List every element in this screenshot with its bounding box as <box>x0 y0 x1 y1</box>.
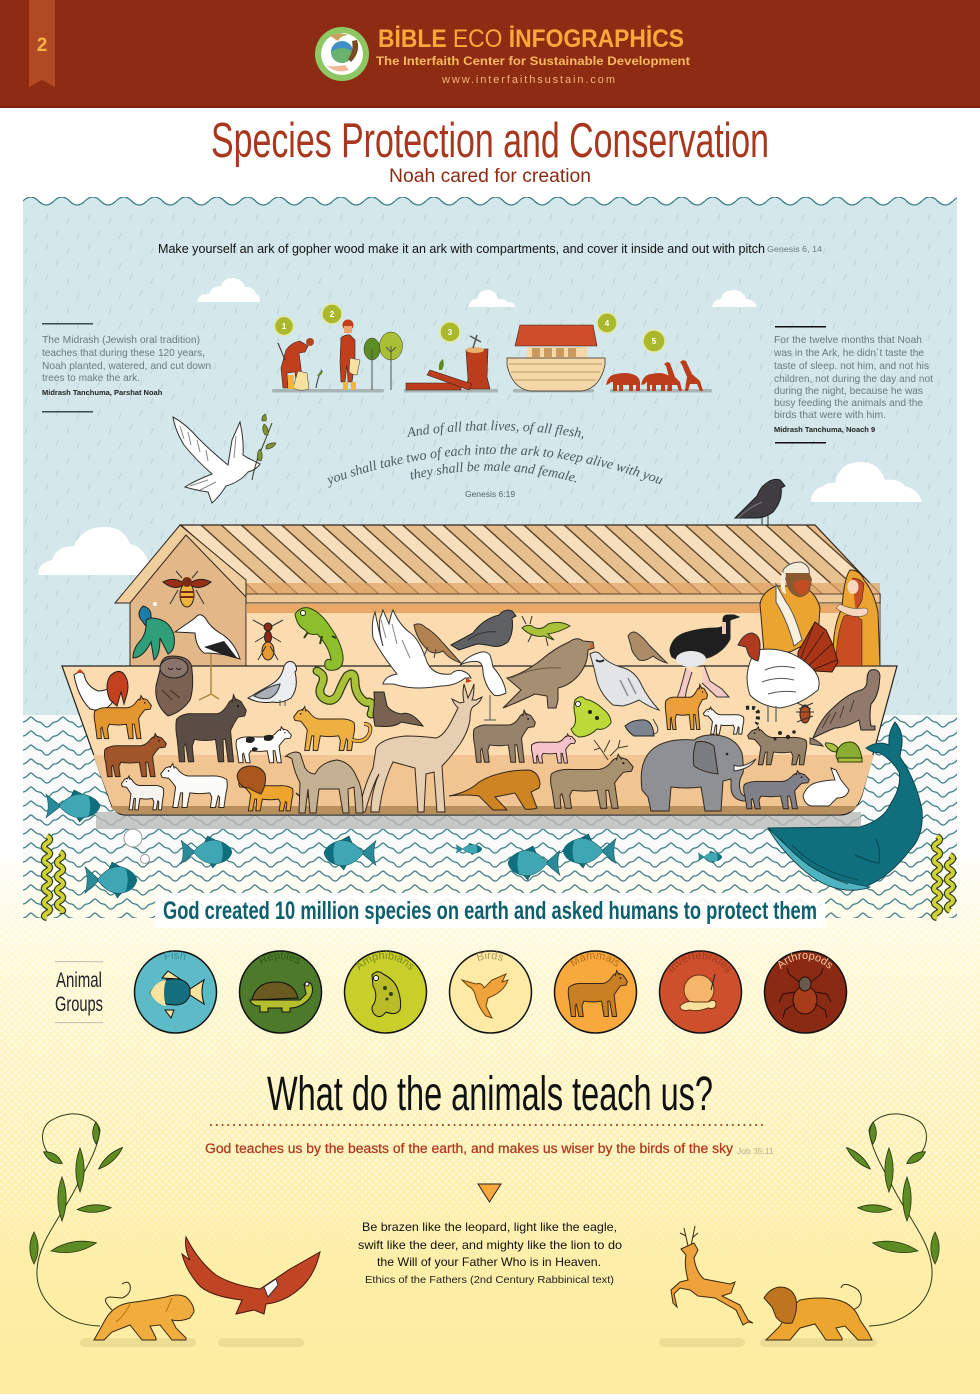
job reference: Job 35:11 <box>737 1146 774 1156</box>
midrash text right: children, not during the day and not <box>774 373 933 385</box>
bug <box>796 703 814 723</box>
verse reference: Genesis 6:19 <box>465 489 515 499</box>
side cabin <box>115 525 246 666</box>
whale <box>768 722 922 890</box>
step number badges: 2 <box>330 310 335 319</box>
step number badges: 5 <box>652 337 657 346</box>
midrash text right <box>773 326 933 444</box>
curved verse: And of all that lives, of all flesh, <box>407 420 584 440</box>
gazelle <box>359 684 482 812</box>
peacock <box>133 602 174 660</box>
fish in the sea <box>46 790 722 898</box>
vine right <box>844 1114 939 1326</box>
midrash text left: teaches that during these 120 years, <box>42 347 205 359</box>
elephant <box>641 735 756 811</box>
crow <box>451 610 516 650</box>
job verse: God teaches us by the beasts of the earth, and makes us wiser by the birds of the sky <box>205 1141 733 1156</box>
scripture line: Genesis 6, 14 <box>767 244 822 254</box>
dog <box>104 734 166 777</box>
group: birds: Birds <box>476 951 503 961</box>
egret <box>460 652 506 720</box>
midrash text right: during the night, because he was <box>774 385 923 397</box>
lion right <box>764 1284 872 1340</box>
brand subtitle: The Interfaith Center for Sustainable Development <box>376 54 690 68</box>
turtle <box>825 742 862 762</box>
ostrich <box>670 615 739 698</box>
midrash text left: The Midrash (Jewish oral tradition) <box>42 334 200 346</box>
curved verse: you shall take two of each into the ark to keep alive with you <box>327 444 663 488</box>
midrash text right: For the twelve months that Noah <box>774 334 922 346</box>
group: fish <box>134 950 218 1034</box>
dove with olive branch <box>173 414 276 503</box>
seaweed right <box>934 836 953 918</box>
rooster <box>74 669 128 710</box>
page number ribbon: 2 <box>37 35 47 56</box>
lemur <box>703 707 758 734</box>
hull shadow <box>96 812 861 829</box>
rabbit <box>803 768 849 806</box>
animal group circles <box>134 950 848 1034</box>
ground shadows <box>80 1338 877 1347</box>
turkey fan <box>798 622 838 672</box>
sparrow <box>414 624 461 663</box>
group: birds <box>448 950 532 1034</box>
icon: step 3 felled logs <box>406 335 490 390</box>
website: www.interfaithsustain.com <box>441 74 615 86</box>
teaching paragraph <box>358 1220 622 1286</box>
stork <box>175 615 240 700</box>
horse <box>176 695 246 762</box>
group: arthropods <box>764 950 848 1034</box>
donkey <box>473 710 535 762</box>
icon: step 2 watering <box>340 320 402 390</box>
hyena <box>748 727 823 765</box>
midrash text left: Noah planted, watered, and cut down <box>42 360 211 372</box>
teaching paragraph: swift like the deer, and mighty like the lion to do <box>358 1238 622 1252</box>
group: mammals <box>554 950 638 1034</box>
steps timeline <box>272 304 712 392</box>
group: arthropods: Arthropods <box>778 953 832 970</box>
otter <box>449 770 540 810</box>
group: invertebrates: Invertebrates <box>667 951 731 972</box>
banner text <box>155 893 825 928</box>
header band <box>0 0 980 108</box>
icon: step 4 small ark <box>507 325 605 391</box>
teaching paragraph: the Will of your Father Who is in Heaven. <box>377 1255 601 1269</box>
snake <box>317 671 373 714</box>
teaching paragraph: Ethics of the Fathers (2nd Century Rabbinical text) <box>365 1274 614 1286</box>
eagle silhouette <box>182 1237 320 1314</box>
polar bear <box>161 764 227 808</box>
brand title: BİBLE ECO İNFOGRAPHİCS <box>378 25 684 53</box>
owl <box>156 656 193 716</box>
midrash text left: Midrash Tanchuma, Parshat Noah <box>42 388 163 397</box>
curved verse: they shall be male and female. <box>410 461 576 482</box>
raven <box>735 479 785 525</box>
sheep <box>121 776 164 810</box>
midrash text right: taste of sleep. not him, and not his <box>774 360 929 372</box>
arrow <box>478 1184 501 1202</box>
cow <box>236 727 291 763</box>
leopard <box>94 1282 194 1340</box>
deck wall <box>246 603 880 666</box>
deer leaping <box>671 1226 753 1325</box>
midrash text right: was in the Ark, he didn´t taste the <box>773 347 924 359</box>
vulture <box>813 670 880 738</box>
curved verse <box>327 420 663 499</box>
deer <box>551 740 633 808</box>
fox <box>94 696 151 739</box>
teaching paragraph: Be brazen like the leopard, light like the eagle, <box>362 1220 617 1234</box>
mouse <box>625 719 658 736</box>
animal groups label: Groups <box>55 993 103 1016</box>
grasshopper <box>522 616 570 646</box>
quail <box>628 632 667 663</box>
step number badges: 4 <box>605 319 610 328</box>
group: invertebrates <box>658 950 742 1034</box>
animal groups label <box>55 961 103 1023</box>
midrash text right: busy feeding the animals and the <box>774 397 923 409</box>
midrash text right: Midrash Tanchuma, Noach 9 <box>774 425 875 434</box>
pig <box>531 734 576 763</box>
turkey body <box>738 633 819 722</box>
group: reptiles: Reptiles <box>258 951 300 964</box>
roof <box>180 525 880 603</box>
step number badges: 1 <box>282 322 287 331</box>
eagle <box>503 639 594 708</box>
logo <box>315 27 369 81</box>
small deer <box>665 684 708 730</box>
group: reptiles <box>238 950 322 1034</box>
animals on the ark <box>74 562 880 813</box>
icon: step 5 animals in a line <box>606 360 703 391</box>
step number badges <box>274 304 665 352</box>
group: fish: Fish <box>164 951 186 960</box>
wife <box>832 570 880 666</box>
step number badges: 3 <box>448 328 453 337</box>
swan <box>372 610 472 688</box>
group: mammals: Mammals <box>570 953 620 966</box>
camel <box>285 752 363 813</box>
midrash text left: trees to make the ark. <box>42 372 140 384</box>
ark <box>62 525 897 829</box>
hull <box>62 666 897 815</box>
clouds <box>38 278 922 575</box>
section heading: What do the animals teach us? <box>267 1068 713 1121</box>
icon: step 1 planting <box>278 338 323 390</box>
weasel <box>373 692 423 726</box>
pigeon <box>248 661 296 706</box>
scripture line: Make yourself an ark of gopher wood make it an ark with compartments, and cover it inside and out with pitch <box>158 242 765 256</box>
midrash text left <box>42 323 211 412</box>
vine left <box>30 1114 125 1326</box>
frog <box>571 697 611 737</box>
bubbles <box>124 829 150 864</box>
page number ribbon <box>29 0 55 87</box>
bee <box>163 571 211 607</box>
ant <box>253 620 283 660</box>
group: amphibians <box>344 950 428 1034</box>
cougar <box>294 707 370 751</box>
lion <box>237 766 310 811</box>
wolf <box>744 771 809 809</box>
subtitle: Noah cared for creation <box>389 166 591 187</box>
chameleon <box>295 608 343 670</box>
animal groups label: Animal <box>56 969 102 992</box>
partridge <box>590 652 659 710</box>
noah <box>760 562 820 652</box>
midrash text right: birds that were with him. <box>774 409 886 421</box>
seaweed left <box>44 836 63 918</box>
group: amphibians: Amphibians <box>356 951 414 970</box>
